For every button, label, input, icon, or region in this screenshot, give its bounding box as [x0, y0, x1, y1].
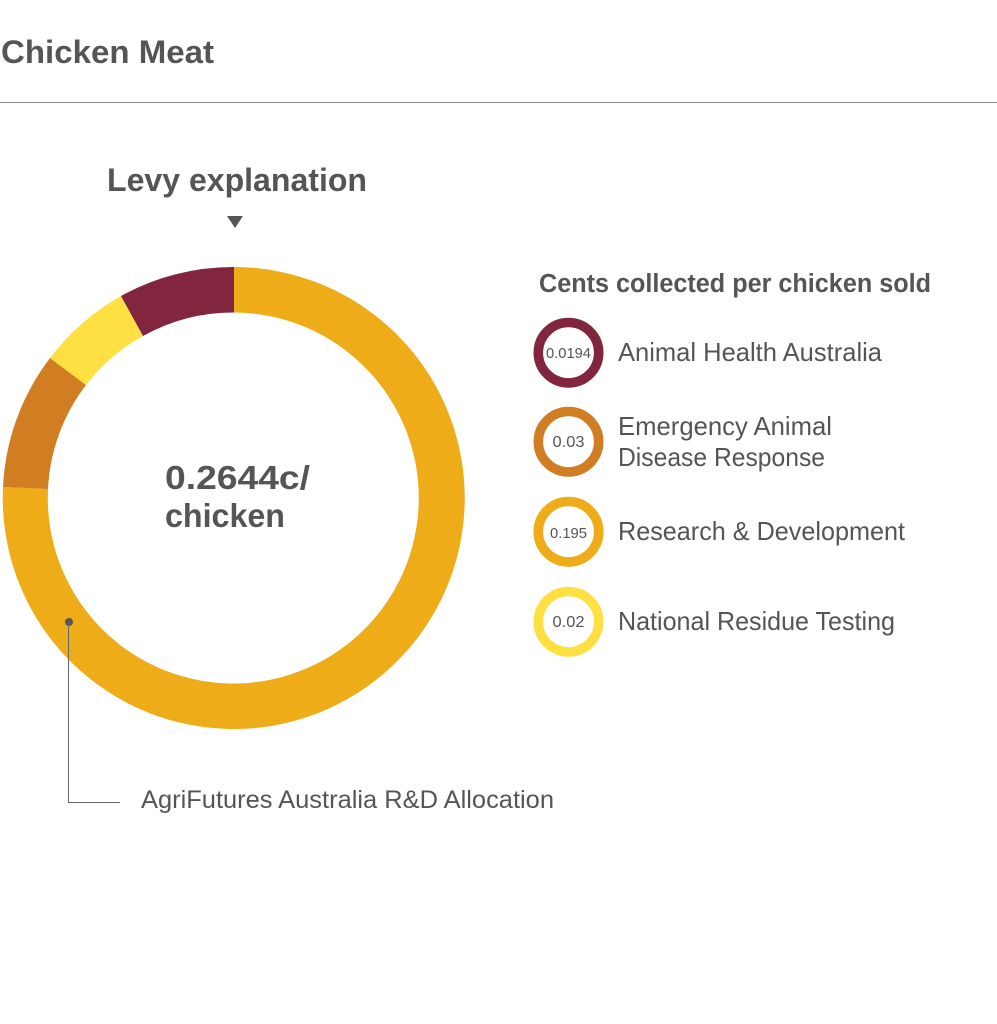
callout: R&D allocation	[65, 618, 554, 814]
segment: research and development	[3, 267, 465, 729]
heading: levy explanation: Levy explanation	[107, 162, 367, 198]
segment: animal health australia	[121, 267, 234, 336]
legend item: emergency animal disease response: 0.03	[552, 434, 585, 451]
legend item: national residue testing	[538, 592, 895, 652]
legend item: animal health australia: 0.0194	[546, 345, 591, 362]
legend item: research and development	[538, 502, 906, 562]
legend item: animal health australia: Animal Health Australia	[618, 337, 883, 367]
legend item: emergency animal disease response: Disease Response	[618, 442, 825, 472]
segment: emergency animal disease response	[3, 358, 86, 489]
legend item: national residue testing: National Residue Testing	[618, 606, 895, 636]
legend item: emergency animal disease response	[538, 411, 832, 472]
donut centre value: 0.2644c/	[165, 459, 310, 496]
legend item: research and development: Research & Development	[618, 516, 906, 546]
legend item: research and development: 0.195	[550, 525, 587, 542]
arrow: down marker	[227, 216, 243, 228]
legend item: animal health australia	[538, 322, 883, 383]
donut chart	[3, 267, 465, 729]
donut centre value: chicken	[165, 497, 285, 534]
legend item: emergency animal disease response: Emergency Animal	[618, 411, 832, 441]
donut centre value	[165, 459, 310, 534]
legend item: national residue testing: 0.02	[552, 614, 585, 631]
segment: national residue testing	[50, 296, 143, 385]
legend heading: Cents collected per chicken sold	[539, 270, 931, 298]
title: Chicken Meat	[1, 34, 214, 70]
callout: R&D allocation: AgriFutures Australia R&D Allocation	[141, 786, 554, 814]
